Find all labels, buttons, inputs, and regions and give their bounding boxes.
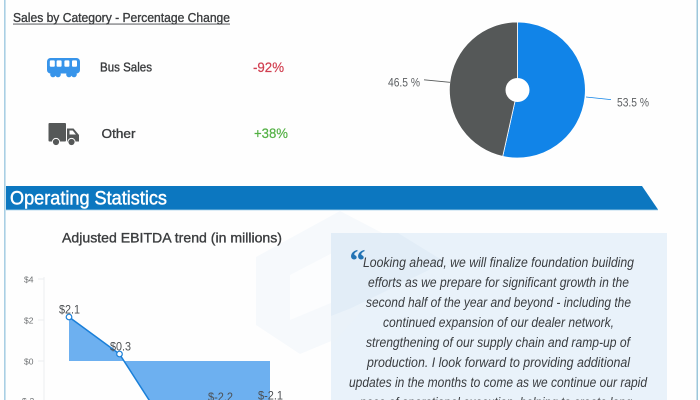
section heading: sales by category: Sales by Category - Percentage Change <box>13 10 230 25</box>
quote text: second half of the year and beyond - including the <box>366 295 631 310</box>
quote text: strengthening of our supply chain and ramp-up of <box>366 335 631 350</box>
icon: bus <box>47 58 80 77</box>
quote mark: “ <box>350 242 366 278</box>
y axis: $2 <box>24 316 34 326</box>
area fill <box>69 317 270 400</box>
icon: truck <box>48 123 79 146</box>
row: other <box>48 123 288 146</box>
quote text: updates in the months to come as we continue our rapid <box>349 375 647 390</box>
trend line <box>69 317 151 400</box>
callout: 46.5 percent: 46.5 % <box>388 76 420 90</box>
callout: 53.5 percent: 53.5 % <box>617 96 649 110</box>
chart title: Adjusted EBITDA trend (in millions) <box>62 230 282 246</box>
quote text <box>349 255 647 400</box>
row: bus sales <box>47 58 284 77</box>
slice: 53.5 percent <box>503 22 585 158</box>
quote text: continued expansion of our dealer network, <box>383 315 614 330</box>
y axis: $4 <box>24 274 34 284</box>
callout: 53.5 percent <box>586 96 649 110</box>
slice: 46.5 percent <box>449 22 518 156</box>
value: bus sales change: -92% <box>253 59 284 75</box>
banner: operating statistics: Operating Statistics <box>10 188 167 210</box>
donut chart: sales share <box>388 22 649 158</box>
quote text: Looking ahead, we will finalize foundation building <box>363 255 634 270</box>
area chart: adjusted EBITDA <box>22 274 283 400</box>
banner: operating statistics <box>6 186 658 210</box>
watermark logo <box>256 211 430 354</box>
y axis <box>22 274 44 400</box>
label: other: Other <box>102 126 136 141</box>
quote panel <box>331 233 667 400</box>
data point: 0.3: $0.3 <box>110 340 131 354</box>
y axis: $0 <box>24 356 34 366</box>
quote text: efforts as we prepare for significant growth in the <box>368 275 629 290</box>
callout: 46.5 percent <box>388 76 450 90</box>
quote text: production. I look forward to providing additional <box>366 355 631 370</box>
value: other change: +38% <box>254 125 288 141</box>
label: bus sales: Bus Sales <box>100 60 152 74</box>
data point: 2.1: $2.1 <box>59 302 80 316</box>
